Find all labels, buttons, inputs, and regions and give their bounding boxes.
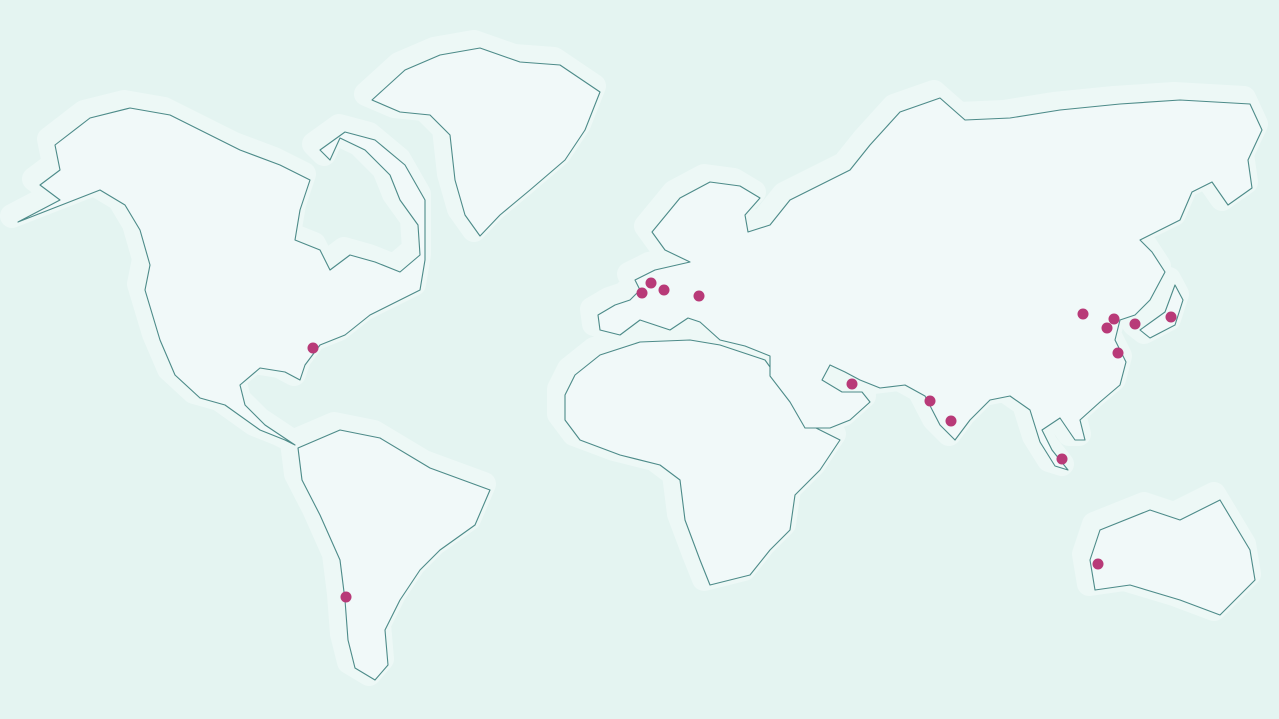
location dots — [308, 278, 1176, 602]
